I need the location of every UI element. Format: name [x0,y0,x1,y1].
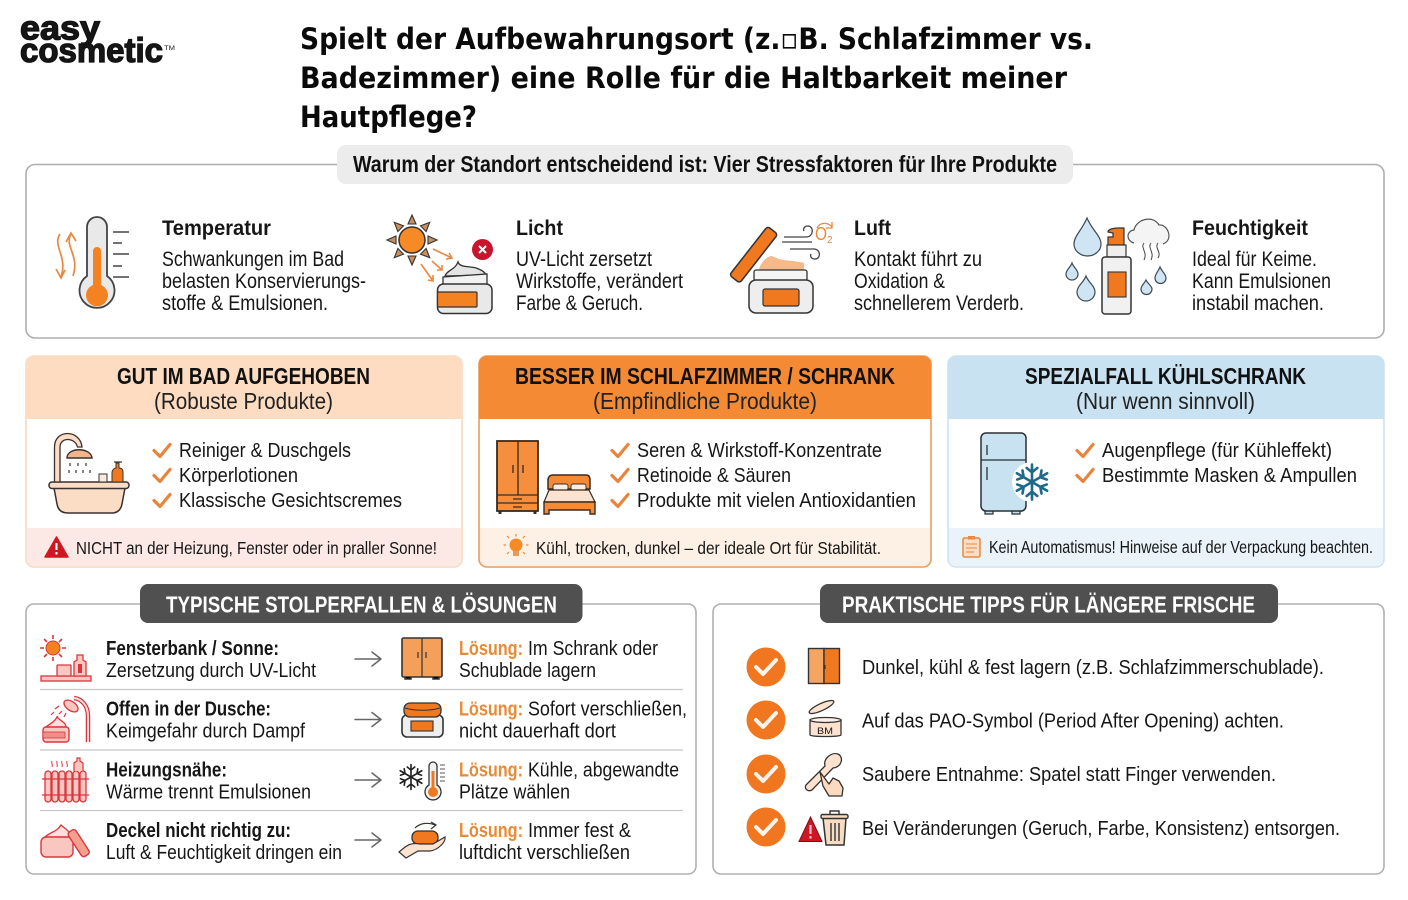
text: Licht: UV-Licht zersetzt [516,248,652,271]
text: solution 1: Lösung: [459,638,523,660]
icon: fridge and snowflake [981,433,1052,514]
text: pitfall 3 [106,760,311,804]
card header: GUT IM BAD AUFGEHOBEN [117,363,370,389]
icon: bathtub with shower [49,434,129,513]
text: Feuchtigkeit: Kann Emulsionen [1192,270,1331,293]
tip 4: discard when changed [746,808,1340,846]
checklist: Seren & Wirkstoff-Konzentrate [637,439,882,462]
text: pitfall 2 [106,698,305,742]
tip 3: clean spatula [746,754,1276,796]
checklist [1077,439,1357,487]
text: Luft: Luft [854,217,891,240]
icon: sun and jar [387,215,493,314]
text: pitfall 3: Heizungsnähe: [106,760,227,782]
text: Licht: Farbe & Geruch. [516,292,643,315]
text: Temperatur: Temperatur [162,217,271,240]
panel: special case fridge [948,356,1384,567]
icon: open jar with air: 2 [827,235,833,246]
text: Feuchtigkeit: instabil machen. [1192,292,1324,315]
text: Feuchtigkeit [1192,217,1331,315]
text: pitfall 1: Zersetzung durch UV-Licht [106,660,316,682]
tip 2: PAO symbol: BM [817,726,833,737]
text: pitfall 1: Fensterbank / Sonne: [106,638,279,660]
icon: hand closing jar [399,822,445,858]
arrow [355,712,381,726]
checklist: Körperlotionen [179,464,298,487]
panel heading: Warum der Standort entscheidend ist: Vier Stressfaktoren für Ihre Produkte [353,151,1057,177]
text: solution 2: nicht dauerhaft dort [459,720,616,742]
icon: snowflake and thermometer [398,762,445,800]
text: pitfall 4: Deckel nicht richtig zu: [106,820,291,842]
panel heading: PRAKTISCHE TIPPS FÜR LÄNGERE FRISCHE [842,592,1255,618]
text: solution 4: luftdicht verschließen [459,842,630,864]
checklist: Reiniger & Duschgels [179,439,351,462]
card header [479,356,931,419]
text: pitfall 3: Wärme trennt Emulsionen [106,782,311,804]
title: Spielt der Aufbewahrungsort (z.▫B. Schlafzimmer vs. [300,22,1093,56]
logo [20,10,175,70]
text: Licht: Licht [516,217,563,240]
card header: BESSER IM SCHLAFZIMMER / SCHRANK [515,363,895,389]
text: solution 1: Im Schrank oder [528,638,658,660]
panel heading [140,584,582,623]
text: Licht: Wirkstoffe, verändert [516,270,683,293]
icon: thermometer [56,217,129,308]
text: solution 3: Kühle, abgewandte [528,760,679,782]
card header [26,356,462,419]
text: pitfall 2: Keimgefahr durch Dampf [106,720,305,742]
icon: bottle with moisture [1066,218,1169,314]
checklist: Klassische Gesichtscremes [179,489,402,512]
card header: (Robuste Produkte) [154,388,333,414]
panel: good in bathroom [26,356,462,567]
panel heading [337,145,1073,184]
text: Luft [854,217,1024,315]
card header: (Nur wenn sinnvoll) [1076,388,1255,414]
tip 2: PAO symbol [746,698,1284,740]
warning note [27,528,461,566]
text: solution 4: Lösung: [459,820,523,842]
checklist: Augenpflege (für Kühleffekt) [1102,439,1332,462]
title: Badezimmer) eine Rolle für die Haltbarkeit meiner [300,61,1067,95]
tip 2: PAO symbol: Auf das PAO-Symbol (Period After Opening) achten. [862,710,1284,732]
tip note: Kühl, trocken, dunkel – der ideale Ort für Stabilität. [536,538,881,558]
checklist: Bestimmte Masken & Ampullen [1102,464,1357,487]
tip note [480,528,930,566]
icon: open jar with air: O [815,224,827,244]
logo: TM [164,46,175,52]
text: Luft: schnellerem Verderb. [854,292,1024,315]
panel: practical tips [713,584,1384,874]
arrow [355,833,381,847]
tip 1: store dark [746,648,1324,686]
text: solution 3: Lösung: [459,760,523,782]
card header: (Empfindliche Produkte) [593,388,817,414]
text: Luft: Oxidation & [854,270,945,293]
card header: SPEZIALFALL KÜHLSCHRANK [1025,363,1306,389]
arrow [355,652,381,666]
text: solution 2 [459,698,687,742]
text: pitfall 2: Offen in der Dusche: [106,698,271,720]
text: Temperatur [162,217,366,315]
warning note: NICHT an der Heizung, Fenster oder in praller Sonne! [76,538,437,558]
icon: closed jar [402,703,443,737]
checklist: Produkte mit vielen Antioxidantien [637,489,916,512]
icon: open jar in shower [43,698,88,742]
note [949,528,1383,566]
text: pitfall 4: Luft & Feuchtigkeit dringen ein [106,842,342,864]
panel: better in bedroom [479,356,931,567]
checklist [154,439,402,512]
logo: easy [20,10,100,48]
text: solution 3 [459,760,679,804]
tip 3: clean spatula: Saubere Entnahme: Spatel statt Finger verwenden. [862,764,1276,786]
icon: jar with lid ajar [41,825,90,858]
arrow [355,773,381,787]
text: Temperatur: Schwankungen im Bad [162,248,344,271]
text: solution 2: Lösung: [459,698,523,720]
text: Temperatur: stoffe & Emulsionen. [162,292,328,315]
icon: open jar with air [729,222,833,313]
text: pitfall 4 [106,820,342,864]
title: Hautpflege? [300,100,477,134]
text: solution 2: Sofort verschließen, [528,698,687,720]
text: Feuchtigkeit: Ideal für Keime. [1192,248,1317,271]
text: Temperatur: belasten Konservierungs- [162,270,366,293]
tip 1: store dark: Dunkel, kühl & fest lagern (z.B. Schlafzimmerschublade). [862,657,1324,679]
checklist: Retinoide & Säuren [637,464,791,487]
panel heading: TYPISCHE STOLPERFALLEN & LÖSUNGEN [166,592,557,618]
text: solution 1 [459,638,658,682]
text: pitfall 1 [106,638,316,682]
card header [948,356,1384,419]
text: solution 4 [459,820,632,864]
checklist [612,439,916,512]
text: Feuchtigkeit: Feuchtigkeit [1192,217,1308,240]
tip 4: discard when changed: Bei Veränderungen (Geruch, Farbe, Konsistenz) entsorgen. [862,818,1340,840]
icon: cabinet [402,638,442,679]
text: Licht [516,217,683,315]
text: Luft: Kontakt führt zu [854,248,982,271]
text: solution 3: Plätze wählen [459,782,570,804]
icon: wardrobe and bed [497,441,595,514]
text: solution 1: Schublade lagern [459,660,596,682]
panel: stress factors [26,145,1384,338]
logo: cosmetic [20,32,163,70]
title [300,22,1093,134]
icon: windowsill in sun [40,635,91,681]
panel heading [820,584,1278,623]
icon: radiator with bottle [42,758,89,802]
text: solution 4: Immer fest & [528,820,632,842]
panel: pitfalls and solutions [26,584,696,874]
